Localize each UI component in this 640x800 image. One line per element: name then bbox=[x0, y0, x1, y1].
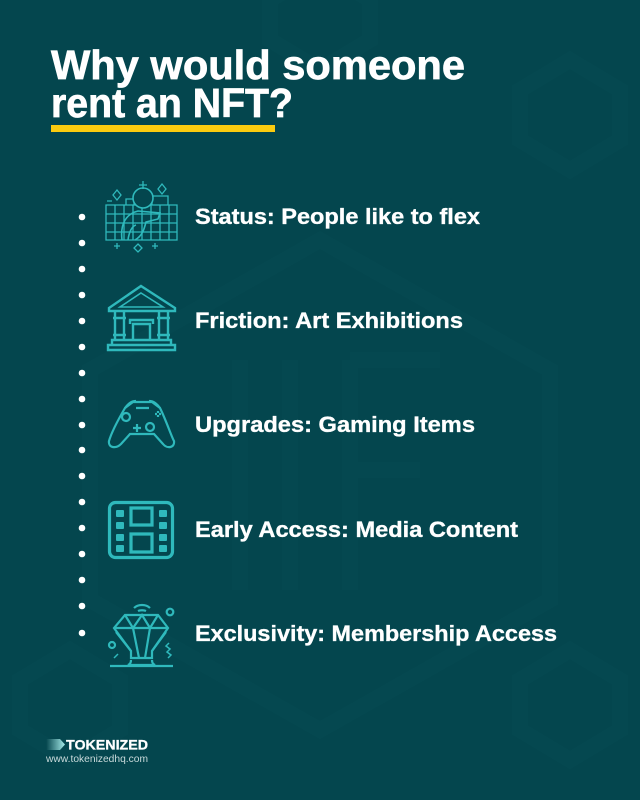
label: exclusivity: Exclusivity: Membership Access bbox=[195, 621, 557, 646]
label: friction: Friction: Art Exhibitions bbox=[195, 308, 463, 333]
label: upgrades: Upgrades: Gaming Items bbox=[195, 412, 475, 437]
title: rent an NFT? bbox=[51, 80, 293, 126]
dotted timeline bbox=[79, 214, 85, 636]
label: early access: Early Access: Media Content bbox=[195, 517, 519, 542]
icon: diamond bbox=[109, 605, 173, 666]
brand url: www.tokenizedhq.com bbox=[45, 753, 148, 765]
label: status: Status: People like to flex bbox=[195, 204, 481, 229]
title: Why would someone bbox=[51, 42, 465, 88]
icon: status, person over price grid bbox=[106, 181, 177, 252]
title underline bbox=[51, 125, 275, 132]
icon: game controller bbox=[109, 401, 174, 447]
icon: museum bbox=[108, 286, 175, 350]
title bbox=[51, 42, 465, 126]
item labels bbox=[195, 204, 557, 646]
brand logo bbox=[45, 736, 148, 765]
icon: film strip bbox=[110, 502, 172, 558]
brand logo: TOKENIZED bbox=[66, 736, 148, 752]
